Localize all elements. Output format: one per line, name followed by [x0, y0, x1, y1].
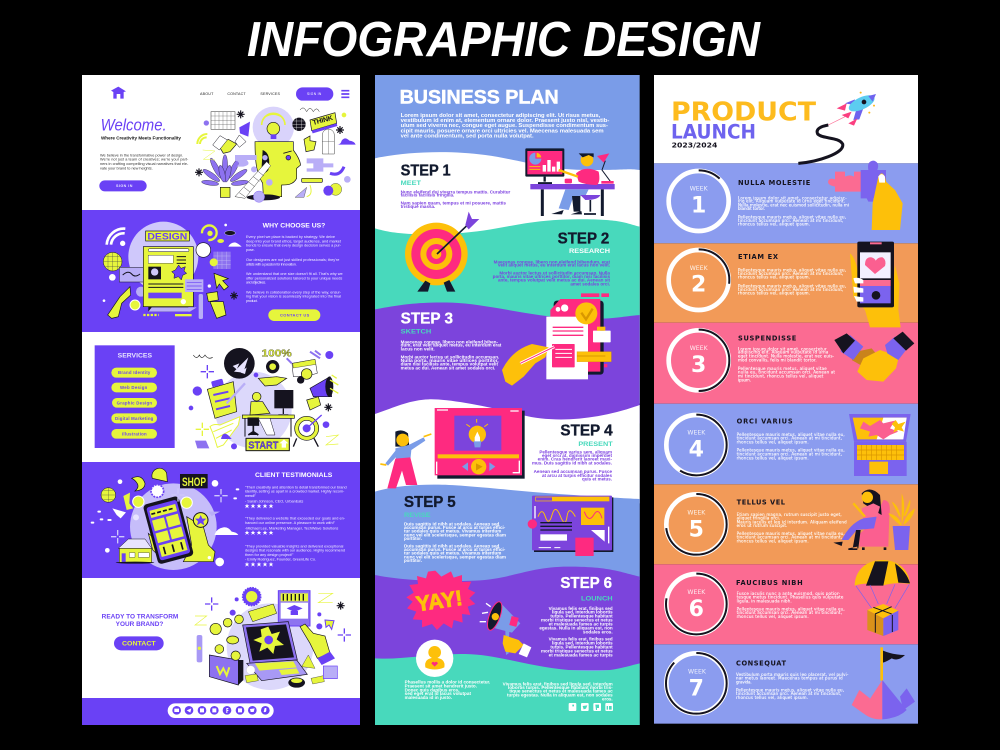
- progress ring: [666, 574, 727, 634]
- week label: WEEK: [688, 668, 707, 675]
- step 6: turpis. Pellentesque habitant: [550, 645, 613, 650]
- step 3: STEP 3: [401, 311, 453, 328]
- step 1: facilisis facilisis fringilla.: [401, 193, 454, 198]
- step 6: egestas. Nulla in aliquam est, non: [539, 625, 613, 630]
- week label: [687, 589, 706, 622]
- step 3: metus ac dui. Aenean sit amet sodales orci.: [401, 366, 495, 371]
- heading: FAUCIBUS NIBH: [736, 579, 803, 587]
- description: tincidunt accumsan orci. Aenean at mi tincidunt,: [737, 436, 842, 441]
- step 6: ligula sed, interdum lobortis: [552, 641, 613, 646]
- footer text right: [503, 681, 613, 701]
- intro text: [401, 113, 610, 139]
- service pills: Graphic Design: [117, 400, 152, 405]
- description: [738, 267, 846, 296]
- step 1: Nam sapien quam, tempus et mi posuere, mattis: [401, 201, 507, 206]
- description: tesque metus tincidunt. Phasellus quis vulputate: [737, 595, 844, 600]
- description: Nulla molestie, erat nec euismod sollicitudin, nulla mi: [738, 202, 849, 207]
- intro text: We're not just a team of creatives; we're your part-: [100, 158, 189, 162]
- step 3: lacus non velit.: [401, 346, 435, 351]
- progress ring: [668, 170, 729, 232]
- description: rhoncus tellus vel, aliquet ipsum.: [737, 455, 809, 460]
- description: Pellentesque mauris metus, aliquet vitae nulla eu,: [737, 432, 845, 437]
- description: Lorem ipsum dolor sit amet, consectetur adipisc-: [738, 195, 847, 200]
- week label: [687, 430, 706, 463]
- footer text left: Donec quis dapibus eros,: [405, 687, 459, 692]
- week label: 7: [689, 676, 704, 701]
- description: rhoncus tellus vel, aliquet ipsum.: [737, 439, 809, 444]
- description: [738, 195, 849, 227]
- description: [737, 432, 845, 460]
- illustration: head with lightbulb: [195, 107, 356, 202]
- illustration: start desk: [189, 348, 338, 451]
- website lower sections: [92, 345, 351, 718]
- step 5: Duis sagittis id nibh at sodales. Aenean sed: [404, 543, 500, 548]
- step 6: ligula sed, interdum lobortis: [552, 610, 613, 615]
- week label: 4: [689, 438, 704, 463]
- intro text: Lorem ipsum dolor sit amet, consectetur adipiscing elit. Ut risus metus,: [401, 113, 601, 119]
- description: mod convallis, felis mi blandit tortor.: [738, 357, 817, 362]
- step 5: tur sodales quis et metus. Vivamus interdum: [404, 551, 501, 556]
- step 6: et malesuada fames ac turpis: [549, 653, 613, 658]
- description: tincidunt accumsan orci. Aenean at mi tincidunt,: [738, 218, 843, 223]
- service pills: Web Design: [120, 385, 148, 390]
- panel: product launch: [654, 75, 918, 724]
- footer text left: malesuada id in justo.: [405, 695, 452, 700]
- description: Vestibulum porta mauris quis leo placerat, vel pulvi-: [736, 672, 849, 677]
- heading: ready to transform: YOUR BRAND?: [116, 621, 163, 628]
- description: Pellentesque mauris metus, aliquet vitae nulla eu,: [738, 267, 846, 272]
- heading: business plan: BUSINESS PLAN: [400, 87, 559, 109]
- social icons bar: [168, 703, 274, 718]
- navigation: ABOUT: [200, 92, 214, 96]
- testimonials: "Their creativity and attention to detail transformed our brand: [245, 485, 347, 489]
- illustration: start desk: START: [248, 440, 279, 451]
- illustration: flag on mountain: [852, 647, 915, 719]
- progress ring: [666, 653, 727, 714]
- illustration: phone shop: SHOP: [182, 475, 206, 489]
- heading: SUSPENDISSE: [738, 334, 797, 342]
- week 2: [668, 242, 901, 327]
- step 1: STEP 1: [401, 162, 451, 179]
- step 1: [401, 162, 511, 209]
- illustration: person at computer: [525, 148, 615, 216]
- illustration: head with lightbulb: THINK: [312, 115, 334, 127]
- star ratings: [245, 504, 273, 567]
- week label: [690, 186, 709, 219]
- step 6: Vivamus felis erat, finibus sed: [549, 637, 613, 642]
- why choose us text: ing that your vision is seamlessly integrated into the final: [246, 295, 341, 299]
- step 2: Morbi auctor lectus ut sollicitudin accumsan. Nulla: [499, 270, 611, 275]
- step 3: Morbi auctor lectus ut sollicitudin accumsan.: [401, 354, 499, 359]
- tagline: Where Creativity Meets Functionality: [101, 135, 182, 140]
- step 5: [404, 494, 506, 563]
- step 3: Nulla porta, mauris vitae ultrices porttitor,: [401, 358, 499, 363]
- description: tincidunt accumsan orci. Aenean at mi tincidunt,: [737, 535, 842, 540]
- week 6: [666, 560, 910, 636]
- step 3: [401, 311, 502, 371]
- week label: WEEK: [687, 589, 706, 596]
- week 1: [668, 161, 903, 232]
- why choose us text: We believe in collaboration every step of the way, ensur-: [246, 290, 342, 294]
- illustration: parachute box: [855, 560, 910, 636]
- intro text: ulum sed viverra nec, congue eget augue. Suspendisse condimentum sus-: [401, 123, 608, 129]
- navigation: [200, 87, 349, 101]
- description: Fusce iaculis nunc a ante euismod, quis potior-: [737, 591, 841, 596]
- intro text: We believe in the transformative power of design.: [100, 153, 183, 157]
- week label: [690, 345, 709, 378]
- step 3: SKETCH: [401, 329, 432, 336]
- illustration: start desk: 100%: [262, 349, 292, 360]
- week label: 6: [689, 597, 704, 622]
- description: Pellentesque mauris metus, aliquet vitae: [738, 366, 827, 371]
- step 5: porttitor.: [404, 558, 422, 563]
- why choose us text: Our designers are not just skilled professionals; they're: [246, 258, 339, 262]
- button: contact: CONTACT: [122, 640, 156, 647]
- button: sign in: [99, 180, 147, 191]
- step 3: diam nisi facilisis ante, tempus volutpat velit: [401, 362, 499, 367]
- panel: business plan: [375, 75, 640, 725]
- illustration: woman in chair with plant: [833, 490, 915, 550]
- services box: [95, 345, 175, 448]
- description: rhoncus tellus vel, aliquet ipsum.: [738, 291, 810, 296]
- step 4: Pellentesque varius sem, aliquam: [539, 449, 612, 454]
- step 6: [539, 575, 613, 658]
- week 5: [666, 490, 915, 555]
- description: [736, 672, 849, 700]
- description: Pellentesque mauris metus, aliquet vitae nulla eu,: [737, 606, 845, 611]
- footer text right: lobortis turpis. Pellentesque habitant morbi tris-: [508, 685, 613, 690]
- week label: WEEK: [687, 430, 706, 437]
- testimonials: identity, setting us apart in a crowded market. Highly recom-: [245, 490, 345, 494]
- description: eget tincidunt. Nulla molestie, erat nec euis-: [738, 353, 835, 358]
- step 4: at arcu at turpis efficitur sodales: [542, 473, 613, 478]
- description: blandit tortor.: [738, 206, 765, 211]
- illustration: editing window: [528, 496, 613, 556]
- description: rhoncus tellus vel, aliquet ipsum.: [737, 539, 809, 544]
- description: ipsum.: [738, 377, 751, 382]
- heading: NULLA MOLESTIE: [738, 179, 811, 187]
- description: ligula, in malesuada nibh.: [737, 599, 792, 604]
- description: nar metus laoreet. Maecenas tempus at purus id: [736, 676, 843, 681]
- heading: welcome: Welcome.: [101, 115, 167, 134]
- description: tincidunt accumsan orci. Aenean at mi tincidunt,: [738, 287, 843, 292]
- description: Pellentesque mauris metus, aliquet vitae nulla eu,: [736, 687, 844, 692]
- week label: 1: [691, 194, 706, 219]
- testimonials: mend!": [245, 494, 256, 498]
- step 1: tristique massa.: [401, 204, 435, 209]
- coloured wave bands: [375, 75, 640, 725]
- description: gravida.: [736, 680, 752, 685]
- title: product launch: LAUNCH: [671, 120, 756, 143]
- illustration: video player: [435, 408, 525, 479]
- step 2: STEP 2: [558, 230, 609, 247]
- why choose us text: Every pixel we place is backed by strategy. We delve: [246, 235, 335, 239]
- illustration: woman: [380, 430, 431, 488]
- step 4: STEP 4: [560, 422, 613, 439]
- button: contact us: CONTACT US: [280, 312, 310, 317]
- illustration: yay burst: [406, 571, 475, 630]
- coloured bands: [654, 75, 918, 724]
- description: tincidunt accumsan orci. Aenean at mi tincidunt,: [736, 691, 841, 696]
- why choose us text: offer personalized solutions tailored to your unique needs: [246, 276, 342, 280]
- illustration: megaphone: [480, 600, 531, 657]
- step 6: morbi tristique senectus et netus: [541, 649, 613, 654]
- footer text left: Praesent sit amet hendrerit justo.: [405, 683, 477, 688]
- heading: CONSEQUAT: [736, 659, 786, 667]
- description: mi tincidunt, rhoncus tellus vel, aliquet: [738, 373, 824, 378]
- step 6: morbi tristique senectus et netus: [541, 617, 613, 622]
- heading: ORCI VARIUS: [737, 417, 793, 425]
- illustration: target: [405, 212, 479, 292]
- step 2: RESEARCH: [569, 248, 610, 255]
- step 3: dum, erat velit aliquet metus, eu interdum erat: [401, 343, 502, 348]
- step 4: enim. Cras hendrerit laoreet maxi-: [538, 457, 613, 462]
- illustration: phone in hand: [850, 242, 901, 327]
- testimonials: -Michael Lee, Marketing Manager, TechWave Solutions: [245, 526, 338, 530]
- description: [738, 346, 835, 382]
- panel: website landing page: [82, 75, 360, 725]
- title: product launch: 2023/2024: [672, 142, 718, 150]
- step 2: velit aliquet metus, eu interdum erat lacus non velit.: [498, 263, 610, 268]
- intro text: vel ante condimentum, sed porta nulla volutpat.: [401, 133, 534, 139]
- description: adipiscing elit. Aliquam vulputate id urna: [738, 350, 829, 355]
- heading: services: SERVICES: [118, 354, 152, 360]
- description: rhoncus tellus vel, aliquet ipsum.: [738, 222, 810, 227]
- description: rhoncus tellus vel, aliquet ipsum.: [738, 275, 810, 280]
- description: tincidunt accumsan orci. Aenean at mi tincidunt,: [738, 271, 843, 276]
- footer text left: sed eget erat id lacus volutpat: [405, 691, 472, 696]
- illustration: design interface: DESIGN: [147, 232, 187, 242]
- step 6: turpis. Pellentesque habitant: [550, 613, 613, 618]
- button: sign in: SIGN IN: [116, 184, 133, 188]
- illustration: phone shop: [92, 468, 238, 570]
- step 5: accumsan purus. Fusce at arcu at turpis effici-: [404, 525, 506, 530]
- description: rhoncus tellus vel, aliquet ipsum.: [736, 695, 808, 700]
- why choose us text: trends to ensure that every design decision serves a pur-: [246, 244, 342, 248]
- description: Pellentesque mauris metus, aliquet vitae nulla eu,: [738, 214, 846, 219]
- week label: 2: [691, 273, 706, 298]
- description: tincidunt accumsan orci. Aenean at mi tincidunt,: [737, 610, 842, 615]
- progress ring: [666, 494, 727, 555]
- testimonials: "They delivered a website that exceeded our goals and en-: [245, 517, 346, 521]
- step 5: STEP 5: [404, 494, 456, 511]
- week 7: [666, 647, 915, 719]
- why choose us text: pose.: [246, 248, 255, 252]
- step 5: nunc vel elit scelerisque, semper egestas diam: [404, 554, 506, 559]
- footer text right: turpis egestas. Nulla in aliquam est, non sodales: [507, 692, 613, 697]
- step 5: porttitor.: [404, 536, 422, 541]
- step 2: ante, tempus volutpat velit metus ac dui. Aenean sit: [498, 278, 611, 283]
- illustration: avatar circle: [416, 640, 453, 677]
- step 3: Maecenas congue, libero non eleifend biben-: [401, 339, 499, 344]
- icon: home: [111, 87, 126, 99]
- step 1: Nunc eleifend dui viverra tempus mattis. Curabitur: [401, 189, 511, 194]
- step 5: accumsan purus. Fusce at arcu at turpis effici-: [404, 547, 506, 552]
- description: tincidunt accumsan orci. Aenean at mi tincidunt,: [737, 451, 842, 456]
- description: nulla eu, tincidunt accumsan orci. Aenean at: [738, 370, 835, 375]
- step 5: REVISE: [404, 512, 431, 519]
- navigation: CONTACT: [227, 92, 246, 96]
- footer text right: Vivamus felis erat, finibus sed ligula sed, interdum: [503, 681, 613, 686]
- description: eros ut rutrum suscipit.: [737, 523, 787, 528]
- week label: WEEK: [690, 265, 709, 272]
- service pills: Digital Marketing: [115, 416, 154, 421]
- week label: WEEK: [690, 186, 709, 193]
- step 5: tur sodales quis et metus. Vivamus interdum: [404, 529, 501, 534]
- description: aliquet fringilla orci.: [737, 515, 780, 520]
- description: rhoncus tellus vel, aliquet ipsum.: [737, 614, 809, 619]
- button: contact us: [268, 309, 320, 321]
- service pills: [111, 368, 157, 439]
- testimonials: hanced our online presence. A pleasure to work with!": [245, 521, 336, 525]
- week label: [690, 265, 709, 298]
- service pills: Brand Identity: [118, 370, 151, 375]
- intro text: vate your brand to new heights.: [100, 166, 153, 170]
- intro text: vestibulum id enim at, elementum ornare dolor. Praesent justo nisl, vestib-: [401, 118, 610, 124]
- description: Etiam sapien magna, rutrum suscipit justo eget,: [737, 512, 842, 517]
- step 4: eget orci at, dignissim imperdiet: [542, 453, 613, 458]
- step 5: Duis sagittis id nibh at sodales. Aenean sed: [404, 521, 500, 526]
- testimonials: - Sarah Johnson, CEO, UrbanEats: [245, 499, 303, 503]
- progress ring: [668, 330, 729, 391]
- step 4: quis et metus.: [582, 477, 612, 482]
- navigation: SERVICES: [260, 92, 281, 96]
- social icons: [569, 703, 613, 711]
- step 6: sodales eros.: [583, 629, 613, 634]
- why choose us text: product.: [246, 299, 258, 303]
- step 5: nunc vel elit scelerisque, semper egestas diam: [404, 532, 506, 537]
- why choose us text: artists with a passion for innovation.: [246, 262, 297, 266]
- footer text left: Phasellus mollis a dolor id consectetur.: [405, 680, 490, 685]
- description: Lorem ipsum dolor sit amet, consectetur: [738, 346, 827, 351]
- testimonials: designs that resonate with our audience. Highly recommend: [245, 549, 345, 553]
- step 1: MEET: [401, 180, 421, 187]
- step 6: et malesuada fames ac turpis: [549, 621, 613, 626]
- week label: [687, 510, 706, 542]
- intro text: cipit mauris, posuere ornare orci ultricies vel. Maecenas malesuada sem: [401, 128, 604, 134]
- title: product launch: PRODUCT: [671, 98, 816, 128]
- step 2: amet sodales orci.: [570, 282, 610, 287]
- illustration: design interface: [103, 222, 242, 319]
- navigation: SIGN IN: [307, 92, 322, 96]
- step 6: Vivamus felis erat, finibus sed: [549, 606, 613, 611]
- lower weeks: [666, 414, 915, 719]
- why choose us text: and objectives.: [246, 281, 266, 285]
- illustration: yay burst: YAY!: [414, 586, 464, 616]
- step 4: [532, 422, 613, 482]
- step 4: mus. Duis sagittis id nibh at sodales.: [532, 461, 612, 466]
- step 2: [493, 230, 611, 287]
- heading: TELLUS VEL: [737, 498, 786, 506]
- description: Pellentesque mauris metus, aliquet vitae nulla eu,: [737, 531, 845, 536]
- website upper sections: [99, 87, 356, 321]
- progress ring: [668, 249, 729, 311]
- illustration: laptop: [849, 414, 911, 476]
- illustration: rocket and road: [798, 92, 877, 163]
- week label: [688, 668, 707, 701]
- illustration: handshake: [834, 332, 914, 382]
- week 4: [666, 414, 911, 476]
- title: product launch: [671, 98, 816, 150]
- step 2: porta, mauris vitae ultrices porttitor, diam nisi facilisis: [493, 274, 611, 279]
- why choose us text: We understand that one size doesn't fit all. That's why we: [246, 272, 343, 276]
- title: INFOGRAPHIC DESIGN: [247, 13, 762, 67]
- heading: ETIAM EX: [738, 253, 778, 261]
- step 6: LOUNCH: [581, 595, 613, 602]
- intro text: [100, 153, 189, 170]
- description: [737, 512, 847, 544]
- heading: ready to transform: [102, 613, 178, 628]
- testimonials: "They provided valuable insights and delivered exceptional: [245, 544, 343, 548]
- description: ing elit. Aliquam vulputate id urna eget tincidunt.: [738, 199, 845, 204]
- heading: ready to transform: READY TO TRANSFORM: [102, 613, 178, 620]
- testimonials: - Emily Rodriguez, Founder, GreenLife Co.: [245, 558, 316, 562]
- footer text left: [405, 680, 490, 700]
- illustration: sketching on document: [502, 293, 611, 386]
- heading: client testimonials: CLIENT TESTIMONIALS: [255, 472, 333, 479]
- footer text right: eros.: [602, 696, 613, 701]
- illustration: puzzle hand: [828, 161, 903, 230]
- illustration: laptop: [195, 588, 351, 690]
- progress ring: [666, 415, 727, 475]
- intro text: ners in crafting compelling visual narratives that ele-: [100, 162, 189, 166]
- step 2: Maecenas congue, libero non eleifend bibendum, erat: [494, 259, 611, 264]
- why choose us text: deep into your brand ethos, target audience, and market: [246, 239, 342, 243]
- week label: WEEK: [690, 345, 709, 352]
- testimonials: [245, 485, 347, 562]
- description: Pellentesque mauris metus, aliquet vitae nulla eu,: [737, 448, 845, 453]
- step 4: PRESENT: [578, 441, 613, 448]
- description: [737, 591, 845, 619]
- description: Mauris iaculis et leo id interdum. Aliquam eleifend: [737, 519, 847, 524]
- week 3: [668, 330, 914, 391]
- testimonials: them for any design project!": [245, 553, 294, 557]
- step 4: Aenean sed accumsan purus. Fusce: [534, 469, 613, 474]
- lower steps: [380, 408, 613, 711]
- description: Pellentesque mauris metus, aliquet vitae nulla eu,: [738, 283, 846, 288]
- week label: 3: [691, 353, 706, 378]
- week label: WEEK: [687, 510, 706, 517]
- button: contact: [114, 636, 164, 650]
- step 6: STEP 6: [560, 575, 612, 592]
- week label: 5: [689, 517, 704, 542]
- service pills: Illustration: [122, 431, 147, 436]
- heading: why choose us: WHY CHOOSE US?: [263, 223, 325, 230]
- why choose us text: [246, 235, 343, 303]
- footer text right: tique senectus et netus et malesuada fames ac: [509, 689, 613, 694]
